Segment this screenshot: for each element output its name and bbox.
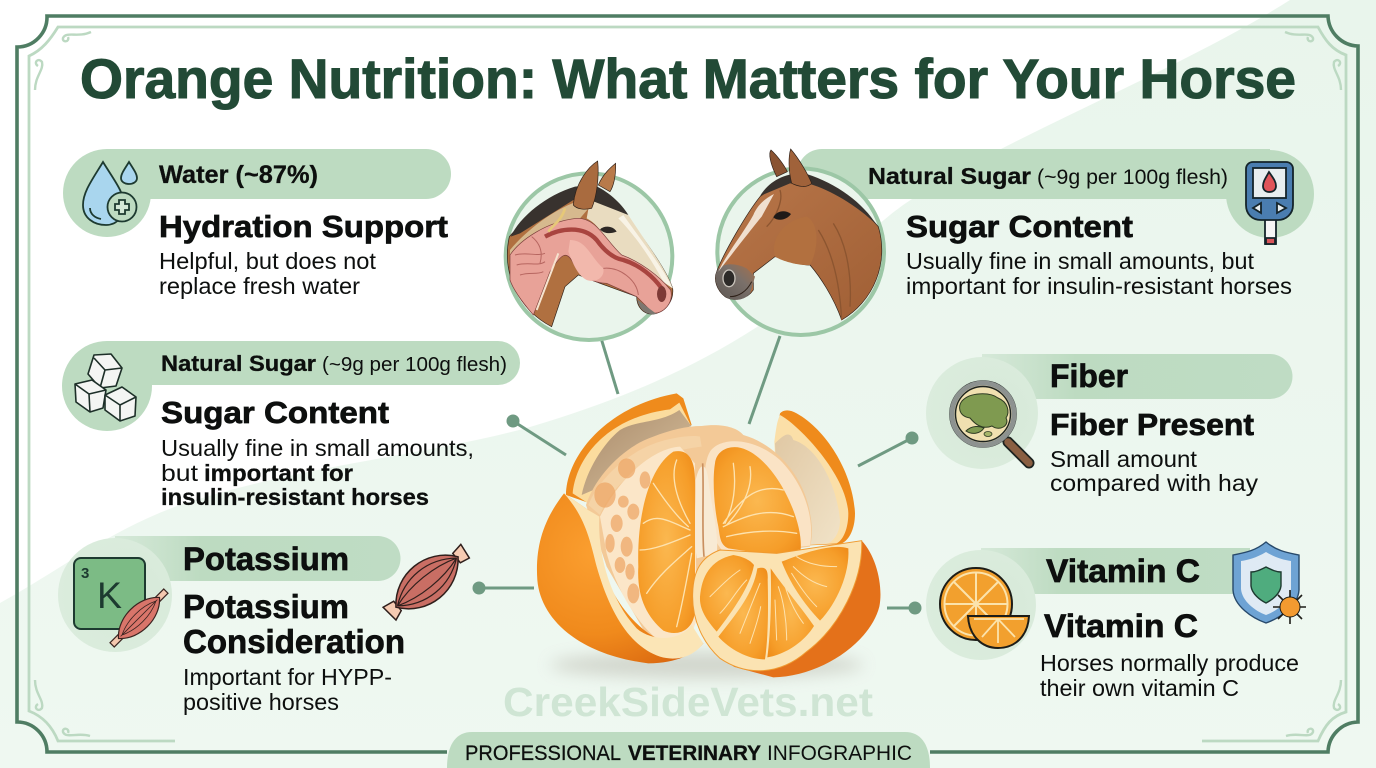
fiber nutrient label: Fiber [1050,358,1128,394]
icon: potassium element tile [74,558,145,629]
front wedge [693,541,862,671]
orange shadow [550,652,863,678]
horse anatomy ears [573,161,616,209]
horse anatomy eye [600,227,617,233]
fiber icon disc [926,357,1038,469]
water heading: Hydration Support [159,209,448,244]
icon: water drops [83,162,137,225]
panel: potassium [58,535,479,715]
orange illustration [537,393,880,678]
sugar description: Usually fine in small amounts, [161,435,474,461]
fiber description [1050,446,1259,496]
sugar nutrient label right [868,163,1228,189]
fiber heading: Fiber Present [1050,407,1254,442]
horse anatomy mane [511,185,628,237]
panel: sugar right [797,149,1314,299]
central segments body [586,425,812,647]
horse anatomy digestive tract [510,218,671,315]
healthy horse head and neck [715,175,882,320]
vitamin C label pill [981,548,1250,594]
vitamin C description: their own vitamin C [1040,675,1239,701]
panel: sugar left [62,341,520,510]
sugar description right: important for insulin-resistant horses [906,273,1292,299]
sugar description: insulin-resistant horses [161,484,429,510]
sugar description right: Usually fine in small amounts, but [906,248,1255,274]
healthy horse far ear [770,150,787,177]
healthy horse muzzle [716,264,755,300]
sugar description [161,435,474,510]
sugar description right [906,248,1292,299]
potassium description [183,664,392,715]
healthy horse eye [773,211,791,220]
wedge flesh sections [700,547,848,659]
icon: magnifier with fiber [950,381,1029,463]
watermark: CreekSideVets.net [503,679,873,725]
water label pill [63,149,451,237]
icon: shield with sun [1233,542,1306,624]
panel: vitamin C [926,542,1306,701]
water description: Helpful, but does not [159,248,377,274]
healthy horse jaw shading [774,217,816,265]
sugar nutrient label right: Natural Sugar [868,163,1031,189]
icon: large muscle [375,535,479,629]
water nutrient label: Water (~87%) [159,161,318,189]
front left peel [537,493,703,663]
sugar heading right: Sugar Content [906,209,1133,244]
vitamin C heading: Vitamin C [1044,608,1198,644]
vitamin C description: Horses normally produce [1040,650,1299,676]
back wedge peel [733,541,880,677]
potassium label pill [115,536,401,581]
left segment with network [600,447,697,642]
potassium heading: Consideration [183,623,405,660]
sugar label pill [62,341,520,431]
sugar description: but [161,460,199,486]
water description [159,248,377,299]
water description: replace fresh water [159,273,360,299]
back left peel [566,393,692,503]
horse anatomy neck and head [507,197,673,327]
title: Orange Nutrition: What Matters for Your Horse [80,47,1296,110]
back right peel [775,410,855,547]
footer badge [447,732,930,768]
icon: small muscle [104,583,174,653]
healthy horse circle [715,149,884,335]
sugar nutrient label [161,351,507,376]
potassium icon disc [58,538,172,652]
footer badge: INFOGRAPHIC [767,742,912,765]
footer badge: PROFESSIONAL [465,742,621,765]
icon: potassium element tile: K [97,575,122,616]
right segment flesh [714,447,801,555]
healthy horse blaze [718,194,774,272]
potassium heading: Potassium [183,588,349,625]
sugar nutrient label: Natural Sugar [161,351,316,376]
vitamin C nutrient label: Vitamin C [1046,553,1200,589]
potassium heading [183,588,405,660]
panel: water [63,149,451,299]
icon: sugar cubes [75,354,136,421]
horse anatomy circle [506,161,673,340]
vitamin C icon disc [926,550,1036,660]
fiber description: compared with hay [1050,470,1259,496]
sugar nutrient label: (~9g per 100g flesh) [322,354,507,376]
fiber label pill [982,354,1292,399]
potassium description: Important for HYPP- [183,664,392,690]
sugar nutrient label right: (~9g per 100g flesh) [1037,166,1228,189]
icon: orange slices [940,568,1029,648]
fiber description: Small amount [1050,446,1198,472]
connector arrows [472,336,922,614]
horse anatomy face [587,200,673,288]
vitamin C description [1040,650,1299,701]
icon: glucose meter [1246,162,1293,244]
sugar label pill right [797,149,1314,238]
horse anatomy upper neck band [510,202,590,257]
panel: fiber [926,354,1292,496]
potassium nutrient label: Potassium [183,541,349,577]
sugar heading: Sugar Content [161,395,389,430]
healthy horse near ear [789,149,812,186]
right segment with pith [704,441,811,555]
potassium description: positive horses [183,689,339,715]
icon: potassium element tile: 3 [81,565,89,582]
center core [695,466,717,558]
healthy horse mane [760,174,877,225]
footer badge: VETERINARY [628,742,761,765]
sugar description: important for [204,460,353,486]
horse anatomy muzzle [657,286,666,302]
